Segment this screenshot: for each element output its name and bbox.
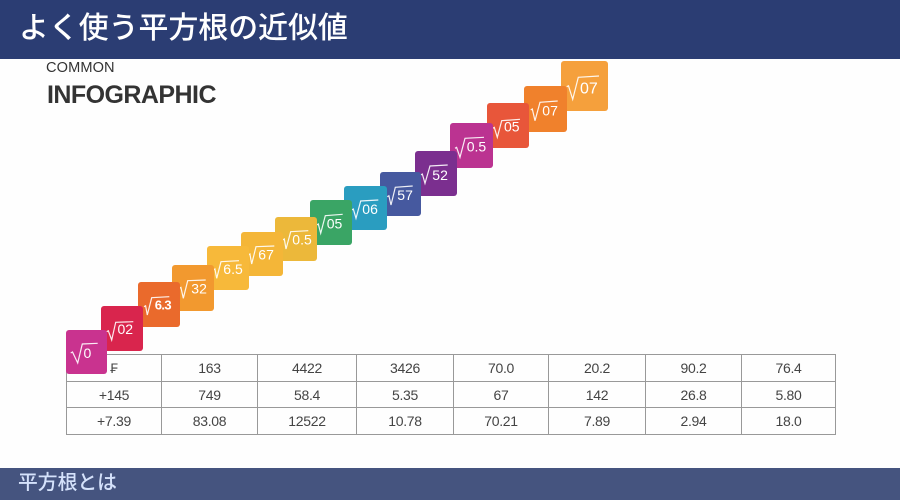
table of square root values: 67 [494,386,508,402]
tile: root 05 red orange [487,103,529,148]
tile: root 02 red [101,306,143,351]
tile: root 07 orange [524,86,567,132]
table of square root values: 18.0 [775,413,802,429]
table of square root values: 58.4 [294,386,320,402]
table of square root values: 2.94 [680,413,707,429]
tile: root 57 blue [380,172,421,216]
table of square root values: 163 [198,360,221,376]
tile: root 0.5 yellow: 0.5 [292,232,312,248]
table of square root values: 70.0 [488,360,514,376]
tile: root 0.5 magenta: 0.5 [467,139,486,155]
header band [0,0,900,59]
tile: root 07 orange: 07 [542,103,558,119]
tile: root 6.5 yellow: 6.5 [223,261,243,277]
tile: root 67 yellow [241,232,283,276]
table of square root values: 5.80 [775,386,802,402]
tile: root 05 green: 05 [327,215,342,231]
table of square root values [66,354,836,435]
tile: root 06 teal [344,186,387,230]
tile: root 07 light orange [561,61,608,111]
table of square root values: 7.89 [584,413,610,429]
table of square root values: 90.2 [680,360,707,376]
table of square root values: 76.4 [775,360,802,376]
tile: root 0 magenta [66,330,107,374]
table of square root values: +145 [99,386,129,402]
tile: root 02 red: 02 [118,321,133,337]
tile: root 05 red orange: 05 [504,119,520,135]
table of square root values: +7.39 [97,413,131,429]
tile: root 32 orange [172,265,214,311]
heading: INFOGRAPHIC: INFOGRAPHIC [47,81,216,109]
tile: root 0.5 yellow [275,217,317,261]
tile: root 6.3 deep orange [138,282,180,327]
tile: root 0.5 magenta [450,123,493,168]
footer heading: 平方根とは [18,472,117,494]
tile: root 06 teal: 06 [362,201,378,217]
table of square root values: 83.08 [193,413,226,429]
table of square root values: 5.35 [392,386,418,402]
tile: root 52 purple: 52 [432,167,448,183]
tile: root 07 light orange: 07 [580,80,598,97]
tile: root 67 yellow: 67 [258,246,274,262]
tile: root 6.3 deep orange: 6.3 [155,297,171,312]
table of square root values: 749 [198,386,221,402]
table of square root values: 20.2 [584,360,610,376]
table of square root values: 10.78 [388,413,422,429]
tile: root 6.5 yellow [207,246,249,290]
tile: root 05 green [310,200,352,245]
table of square root values: 3426 [390,360,420,376]
footer band [0,468,900,500]
table of square root values: 4422 [292,360,322,376]
table of square root values: ₣ [110,360,118,376]
table of square root values: 142 [586,386,608,402]
label: COMMON: COMMON [46,60,115,76]
table of square root values: 12522 [288,413,326,429]
tile: root 57 blue: 57 [397,187,413,203]
table of square root values: 70.21 [484,413,518,429]
tile: root 32 orange: 32 [191,280,207,296]
title: よく使う平方根の近似値 [19,12,348,45]
tile: root 0 magenta: 0 [84,345,92,361]
table of square root values: 26.8 [680,386,707,402]
tile: root 52 purple [415,151,457,196]
